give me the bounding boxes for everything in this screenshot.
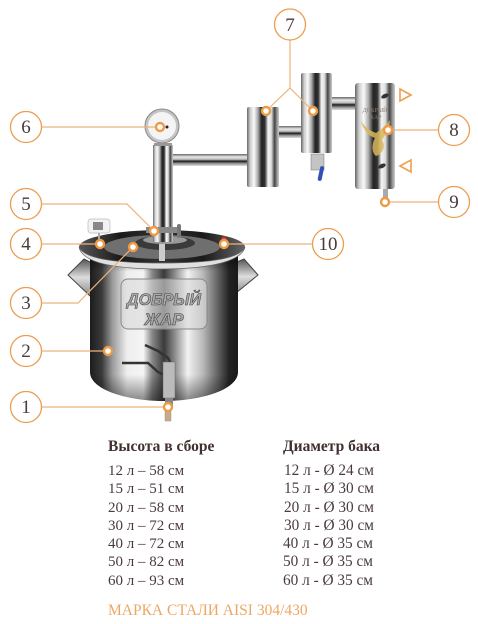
horizontal pipe 2 [277, 126, 303, 138]
callout 6 [10, 112, 164, 142]
callout 9: 9 [449, 192, 459, 213]
embossed brand plate [121, 279, 207, 329]
diameter values: 20 л - Ø 30 см [284, 499, 374, 516]
diameter values: 60 л - Ø 35 см [283, 572, 373, 589]
embossed brand plate: ЖАР [144, 310, 184, 329]
diameter column [283, 438, 380, 589]
cooler cylinder: ДОБРЫЙ [363, 106, 388, 114]
diameter values: 30 л - Ø 30 см [284, 517, 374, 534]
embossed brand plate: ДОБРЫЙ [125, 289, 202, 309]
height column [108, 438, 215, 589]
horizontal pipe 3 [331, 97, 358, 110]
callout 5 [10, 188, 158, 235]
height values: 20 л – 58 см [108, 500, 185, 516]
callout 8: 8 [449, 120, 459, 141]
height values: 50 л – 82 см [108, 554, 185, 570]
still apparatus [68, 73, 395, 421]
outlet tube [383, 189, 388, 202]
height values: 30 л – 72 см [108, 518, 185, 534]
heading: height: Высота в сборе [108, 438, 215, 455]
pressure gauge [145, 109, 179, 146]
callout 10 [220, 228, 344, 260]
horizontal pipe 1 [173, 154, 249, 166]
sampling valve [311, 154, 324, 181]
callout 10: 10 [318, 234, 338, 255]
callout 7 [262, 9, 317, 115]
second cylinder [301, 73, 332, 153]
steel grade note: МАРКА СТАЛИ AISI 304/430 [108, 602, 308, 619]
heading: diameter: Диаметр бака [283, 438, 380, 455]
callout 1 [10, 392, 172, 422]
callout 3: 3 [21, 293, 31, 314]
diameter values: 12 л - Ø 24 см [284, 462, 374, 479]
height values: 15 л – 51 см [108, 481, 185, 497]
arrow: coolant out [400, 160, 411, 172]
red indicator [222, 236, 226, 242]
callout 4 [10, 228, 104, 260]
diameter values [283, 462, 374, 589]
drain tap [122, 345, 175, 421]
callout 7: 7 [285, 15, 295, 36]
height values: 12 л – 58 см [108, 463, 185, 479]
icon: right tank handle [230, 259, 258, 294]
callout 6: 6 [21, 117, 31, 138]
callout 8 [384, 114, 470, 146]
callout 2: 2 [21, 341, 31, 362]
height values: 40 л – 72 см [108, 536, 185, 552]
boiler tank [90, 254, 238, 401]
tank lid [79, 230, 245, 269]
diameter values: 50 л - Ø 35 см [283, 553, 373, 570]
vertical column [153, 145, 173, 242]
callout 5: 5 [21, 194, 31, 215]
icon: left tank handle [68, 259, 96, 296]
callout 2 [10, 336, 112, 366]
diameter values: 15 л - Ø 30 см [284, 480, 374, 497]
callout 1: 1 [21, 397, 31, 418]
diameter values: 40 л - Ø 35 см [283, 535, 373, 552]
callout 9 [381, 186, 470, 218]
clamp [146, 224, 181, 238]
callout 4: 4 [21, 234, 31, 255]
height values: 60 л – 93 см [108, 573, 185, 589]
callout 3 [10, 243, 137, 318]
arrow: coolant in [400, 89, 411, 101]
height values [108, 463, 185, 589]
thermometer display [88, 219, 110, 241]
cooler cylinder: ЖАР [368, 115, 382, 121]
cooler cylinder [355, 83, 395, 189]
first cylinder [247, 107, 279, 187]
